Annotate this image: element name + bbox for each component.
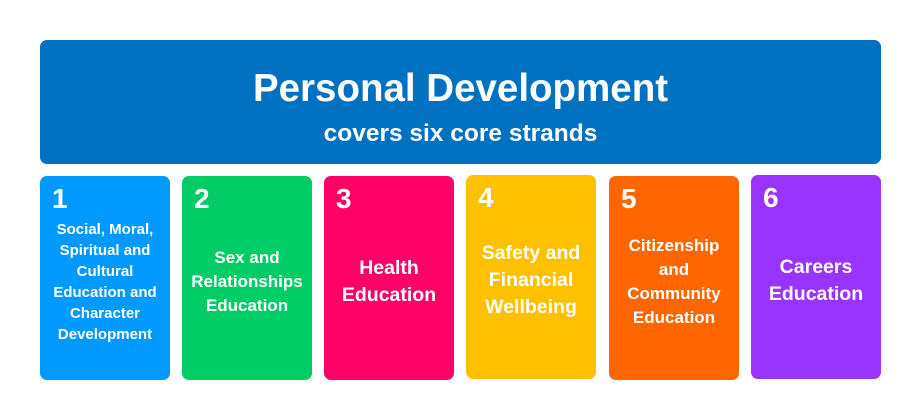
number 6: 6 [763,182,779,213]
card 4 [466,175,596,379]
text 2: Relationships [191,272,303,290]
text 6: Careers [780,256,852,278]
text 1 [53,220,157,342]
text 4: Wellbeing [485,296,577,318]
header panel [40,40,881,164]
title: Personal Development [253,67,668,110]
text 5: Community [627,284,721,302]
card 5 [609,176,739,380]
card 2 [182,176,312,380]
text 1: Education and [53,284,157,300]
text 1: Character [70,304,140,322]
text 4 [482,242,580,318]
card 3 [324,176,454,380]
card 6 [751,175,881,379]
text 3: Health [359,256,419,278]
text 1: Social, Moral, [57,220,153,238]
text 1: Cultural [77,262,133,280]
text 5: and [659,260,689,278]
text 4: Financial [489,269,573,291]
text 3 [342,256,436,306]
card 1 [40,176,170,380]
text 2 [191,248,303,314]
text 5: Education [633,308,715,326]
number 2: 2 [194,183,210,214]
text 5: Citizenship [629,236,719,254]
text 2: Sex and [214,248,280,266]
text 6 [769,256,863,304]
text 2: Education [206,296,288,314]
subtitle: covers six core strands [324,120,597,147]
text 6: Education [769,282,863,304]
number 3: 3 [336,183,352,214]
number 5: 5 [621,183,637,214]
text 1: Development [58,326,152,342]
text 5 [627,236,721,326]
number 1: 1 [52,183,68,214]
text 1: Spiritual and [60,242,150,258]
text 3: Education [342,284,436,306]
text 4: Safety and [482,242,580,264]
number 4: 4 [478,182,494,213]
